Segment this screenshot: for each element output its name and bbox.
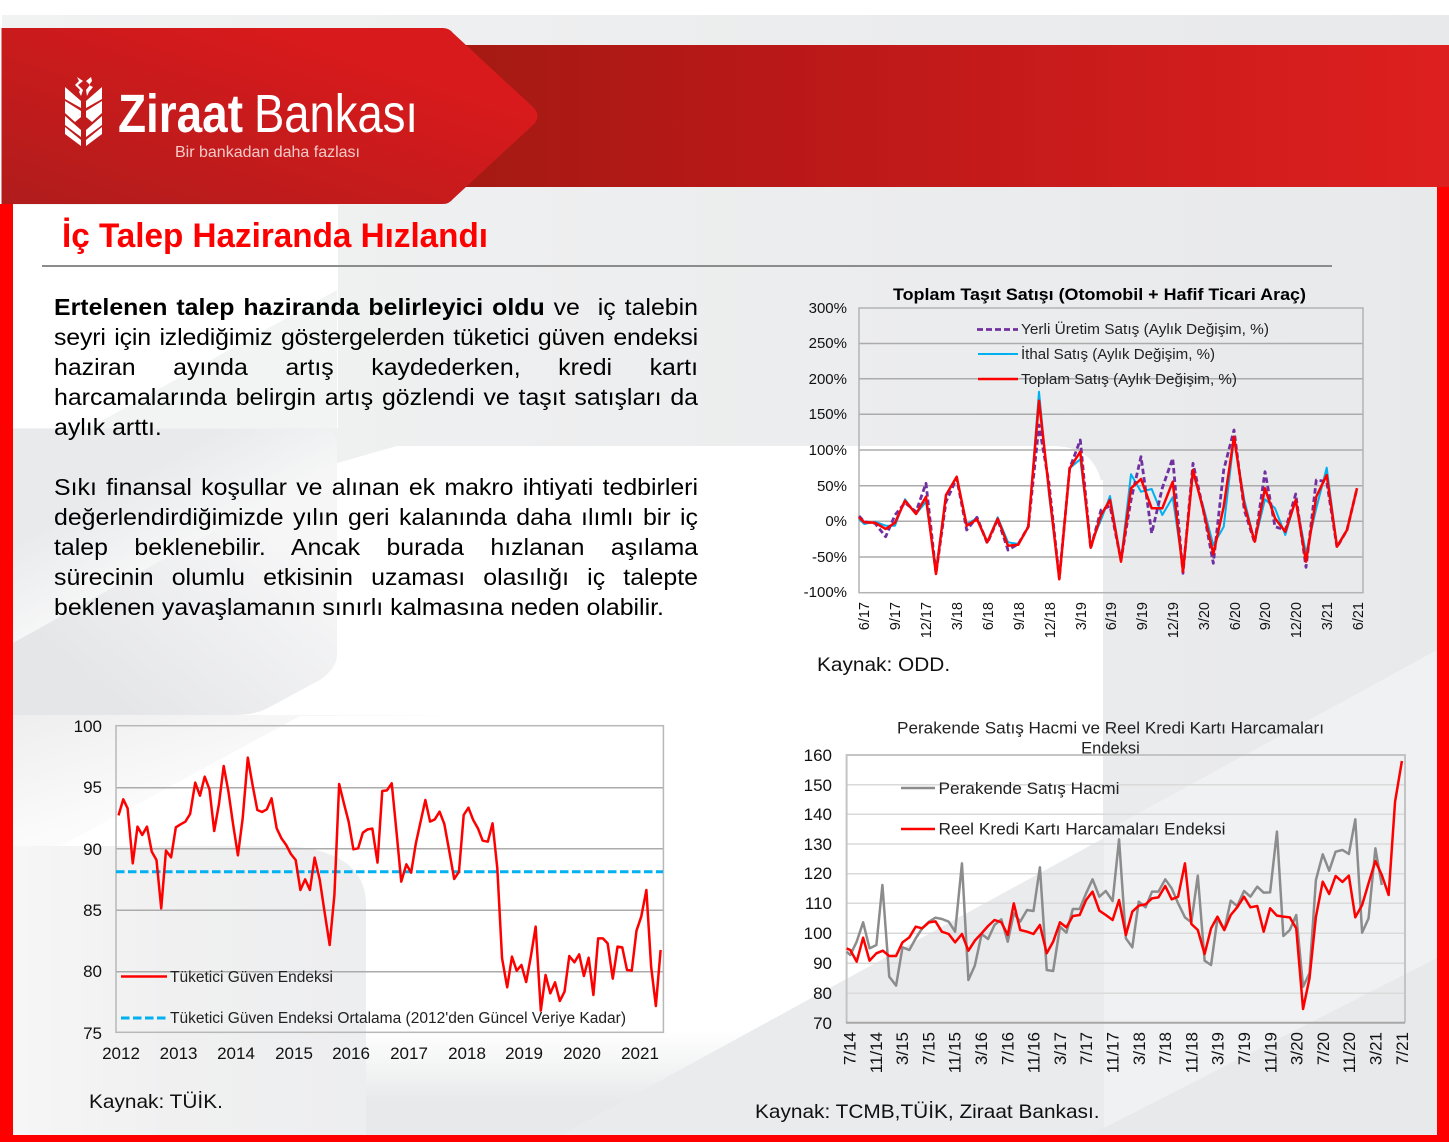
body text: Ertelenen talep haziranda belirleyici oldu ve iç talebin — [54, 294, 698, 320]
x axis labels: 3/21 — [1320, 602, 1336, 630]
series: Perakende Satış Hacmi — [847, 819, 1382, 987]
x axis labels: 2013 — [160, 1044, 198, 1063]
y axis labels: 200% — [809, 371, 847, 388]
x axis labels: 9/18 — [1012, 602, 1028, 630]
x axis labels: 6/21 — [1351, 602, 1367, 630]
x axis labels: 6/19 — [1104, 602, 1120, 630]
y axis labels: 95 — [83, 778, 102, 797]
gridlines and axes — [116, 726, 663, 1032]
x axis labels: 7/20 — [1314, 1032, 1333, 1065]
legend — [977, 320, 1269, 388]
body text: Sıkı finansal koşullar ve alınan ek makro ihtiyati tedbirleri — [54, 474, 698, 500]
chart title: Endeksi — [1081, 740, 1140, 758]
x axis labels: 12/17 — [919, 602, 935, 638]
x axis labels: 3/18 — [950, 602, 966, 630]
legend: Tüketici Güven Endeksi Ortalama (2012'den Güncel Veriye Kadar) — [170, 1010, 626, 1027]
legend: Reel Kredi Kartı Harcamaları Endeksi — [938, 820, 1226, 838]
header band — [2, 28, 1449, 204]
legend — [121, 969, 626, 1027]
legend: İthal Satış (Aylık Değişim, %) — [1021, 345, 1215, 363]
x axis labels: 2017 — [390, 1044, 428, 1063]
x axis labels: 2015 — [275, 1044, 313, 1063]
x axis labels: 3/15 — [893, 1032, 912, 1065]
x axis labels: 7/14 — [840, 1032, 860, 1065]
title: İç Talep Haziranda Hızlandı — [62, 217, 488, 255]
x axis labels: 12/20 — [1289, 602, 1305, 638]
x axis labels: 2012 — [102, 1044, 140, 1063]
y axis labels: 120 — [804, 864, 832, 883]
legend: Yerli Üretim Satış (Aylık Değişim, %) — [1021, 320, 1269, 338]
y axis labels: 0% — [825, 513, 847, 530]
x axis labels: 11/20 — [1340, 1032, 1359, 1073]
logo wordmark — [118, 84, 418, 144]
x axis labels: 6/17 — [857, 602, 873, 630]
logo: Ziraat Bankası — [65, 77, 418, 161]
y axis labels: 150% — [809, 406, 847, 423]
y axis labels: 100 — [804, 924, 832, 943]
x axis labels: 7/21 — [1393, 1032, 1412, 1065]
y axis labels: 50% — [817, 478, 847, 495]
x axis labels: 12/18 — [1043, 602, 1059, 638]
x axis labels: 3/21 — [1366, 1032, 1386, 1065]
x axis labels: 2020 — [563, 1044, 601, 1063]
y axis labels: 90 — [813, 954, 832, 973]
x axis labels: 3/20 — [1197, 602, 1213, 630]
y axis labels — [804, 746, 832, 1033]
logo slogan: Bir bankadan daha fazlası — [175, 144, 360, 161]
y axis labels: 85 — [83, 901, 102, 920]
x axis labels: 12/19 — [1166, 602, 1182, 638]
x axis labels: 11/17 — [1104, 1032, 1122, 1073]
icon: wheat — [65, 77, 102, 146]
body text: sürecinin olumlu etkisinin uzaması olasılığı iç talepte — [54, 564, 698, 590]
x axis labels: 9/19 — [1135, 602, 1151, 630]
source: TCMB: Kaynak: TCMB,TÜİK, Ziraat Bankası. — [755, 1101, 1100, 1123]
body text: beklenen yavaşlamanın sınırlı kalmasına neden olabilir. — [54, 594, 664, 620]
series: Reel Kredi Kartı Harcamaları — [847, 761, 1402, 1009]
chart: Tüketici Güven Endeksi — [74, 717, 664, 1063]
y axis labels: 80 — [813, 984, 832, 1003]
body text: değerlendirdiğimizde yılın geri kalanında daha ılımlı bir iç — [54, 504, 698, 530]
x axis labels: 7/15 — [919, 1032, 938, 1065]
y axis labels: -50% — [812, 549, 847, 566]
x axis labels — [840, 1032, 1412, 1073]
source: TÜİK: Kaynak: TÜİK. — [89, 1091, 223, 1113]
series: ortalama — [116, 870, 663, 873]
body text: seyri için izlediğimiz göstergelerden tüketici güven endeksi — [54, 324, 698, 350]
chart title — [897, 720, 1324, 758]
y axis labels: 110 — [805, 894, 832, 913]
y axis labels: 140 — [804, 805, 832, 824]
x axis labels: 2018 — [448, 1044, 486, 1063]
gridlines and axes — [859, 308, 1363, 593]
body text — [54, 294, 698, 620]
series: Toplam Satış — [859, 401, 1357, 579]
x axis labels: 11/15 — [946, 1032, 965, 1073]
x axis labels: 11/18 — [1182, 1032, 1201, 1073]
series: İthal Satış — [859, 392, 1357, 577]
x axis labels: 9/17 — [888, 602, 904, 630]
chart: Perakende Satış Hacmi ve Reel Kredi Kartı Harcamaları — [804, 720, 1412, 1073]
body text: harcamalarında belirgin artış gözlendi ve taşıt satışları da — [54, 384, 698, 410]
gridlines and axes — [846, 755, 1405, 1023]
x axis labels: 3/20 — [1288, 1032, 1307, 1065]
x axis labels: 7/16 — [998, 1032, 1017, 1065]
x axis labels: 11/19 — [1261, 1032, 1280, 1073]
x axis labels: 2014 — [217, 1044, 255, 1063]
y axis labels: 100 — [74, 717, 102, 736]
source: ODD: Kaynak: ODD. — [817, 654, 950, 676]
chart title: Toplam Taşıt Satışı (Otomobil + Hafif Ticari Araç) — [893, 285, 1306, 304]
legend: Tüketici Güven Endeksi — [170, 969, 333, 986]
y axis labels: 90 — [83, 840, 102, 859]
y axis labels: -100% — [804, 584, 847, 601]
x axis labels: 2021 — [621, 1044, 659, 1063]
legend: Perakende Satış Hacmi — [938, 779, 1120, 798]
y axis labels: 150 — [804, 776, 832, 795]
y axis labels — [74, 717, 102, 1043]
y axis labels: 75 — [83, 1024, 102, 1043]
legend — [901, 779, 1226, 838]
y axis labels — [804, 300, 847, 601]
x axis labels: 2019 — [505, 1044, 543, 1063]
x axis labels: 3/18 — [1130, 1032, 1149, 1065]
x axis labels: 11/16 — [1025, 1032, 1044, 1073]
x axis labels: 3/17 — [1051, 1032, 1070, 1065]
y axis labels: 100% — [809, 442, 847, 459]
x axis labels: 7/19 — [1235, 1032, 1254, 1065]
y axis labels: 130 — [804, 835, 832, 854]
x axis labels — [102, 1044, 659, 1063]
x axis labels: 3/19 — [1209, 1032, 1228, 1065]
y axis labels: 160 — [804, 746, 832, 765]
series: Tüketici Güven Endeksi — [119, 758, 661, 1011]
x axis labels: 6/18 — [981, 602, 997, 630]
chart title: Perakende Satış Hacmi ve Reel Kredi Kartı Harcamaları — [897, 720, 1324, 738]
body text: aylık arttı. — [54, 414, 162, 440]
chart: Toplam Taşıt Satışı — [804, 285, 1367, 638]
body text: haziran ayında artış kaydederken, kredi kartı — [54, 354, 698, 380]
x axis labels: 3/19 — [1074, 602, 1090, 630]
y axis labels: 80 — [83, 962, 102, 981]
series: Yerli Üretim Satış — [859, 425, 1357, 578]
y axis labels: 70 — [813, 1014, 832, 1033]
x axis labels — [857, 602, 1367, 638]
x axis labels: 2016 — [332, 1044, 370, 1063]
logo wordmark: Ziraat — [118, 84, 243, 144]
x axis labels: 7/17 — [1077, 1032, 1096, 1065]
legend: Toplam Satış (Aylık Değişim, %) — [1021, 371, 1237, 388]
body text: talep beklenebilir. Ancak burada hızlanan aşılama — [54, 534, 698, 560]
x axis labels: 7/18 — [1156, 1032, 1175, 1065]
x axis labels: 9/20 — [1258, 602, 1274, 630]
x axis labels: 3/16 — [972, 1032, 991, 1065]
y axis labels: 300% — [809, 300, 847, 317]
x axis labels: 11/14 — [867, 1032, 886, 1073]
x axis labels: 6/20 — [1228, 602, 1244, 630]
y axis labels: 250% — [809, 335, 847, 352]
